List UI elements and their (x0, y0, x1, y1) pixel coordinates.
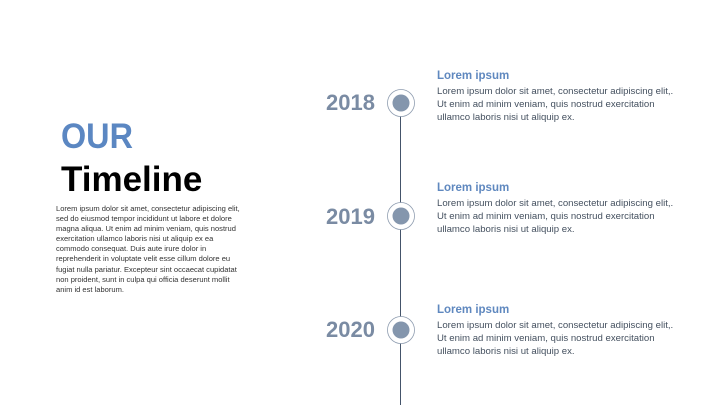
entry text (437, 198, 673, 235)
entry heading: Lorem ipsum (437, 304, 509, 316)
year: 2020: 2020 (326, 317, 375, 342)
entry text: Lorem ipsum dolor sit amet, consectetur adipiscing elit,. (437, 86, 673, 97)
entry text (437, 86, 673, 123)
text block: intro paragraph: Lorem ipsum dolor sit amet, consectetur adipiscing elit, (56, 204, 240, 213)
panel: 2020 entry (437, 304, 673, 357)
heading: OUR: OUR (61, 117, 133, 156)
text block: intro paragraph: reprehenderit in voluptate velit esse cillum dolore eu (56, 254, 230, 263)
entry text: ullamco laboris nisi ut aliquip ex. (437, 346, 575, 357)
entry text (437, 320, 673, 357)
icon: 2019 marker (388, 202, 414, 230)
text block: intro paragraph: non proident, sunt in culpa qui officia deserunt mollit (56, 275, 230, 284)
text block: intro paragraph: magna aliqua. Ut enim ad minim veniam, quis nostrud (56, 224, 236, 233)
icon: 2020 marker (388, 316, 414, 344)
entry text: Lorem ipsum dolor sit amet, consectetur adipiscing elit,. (437, 198, 673, 209)
entry text: ullamco laboris nisi ut aliquip ex. (437, 112, 575, 123)
text block: intro paragraph: commodo consequat. Duis aute irure dolor in (56, 244, 206, 253)
panel: 2019 entry (437, 182, 673, 235)
heading: Timeline: Timeline (61, 160, 202, 199)
panel: 2018 entry (437, 70, 673, 123)
entry heading: Lorem ipsum (437, 70, 509, 82)
text block: intro paragraph: exercitation ullamco laboris nisi ut aliquip ex ea (56, 234, 213, 243)
icon: 2018 marker (388, 90, 414, 116)
entry heading: Lorem ipsum (437, 182, 509, 194)
entry text: ullamco laboris nisi ut aliquip ex. (437, 224, 575, 235)
chart: timeline line and markers (387, 89, 415, 405)
entry text: Lorem ipsum dolor sit amet, consectetur adipiscing elit,. (437, 320, 673, 331)
entry text: Ut enim ad minim veniam, quis nostrud exercitation (437, 211, 655, 222)
text block: intro paragraph: anim id est laborum. (56, 285, 124, 294)
entry text: Ut enim ad minim veniam, quis nostrud exercitation (437, 99, 655, 110)
year: 2018: 2018 (326, 90, 375, 115)
year: 2019: 2019 (326, 204, 375, 229)
text block: intro paragraph: fugiat nulla pariatur. Excepteur sint occaecat cupidatat (56, 265, 237, 274)
text block: intro paragraph: sed do eiusmod tempor incididunt ut labore et dolore (56, 214, 232, 223)
timeline line (400, 116, 402, 405)
entry text: Ut enim ad minim veniam, quis nostrud exercitation (437, 333, 655, 344)
text block: intro paragraph (56, 204, 240, 294)
